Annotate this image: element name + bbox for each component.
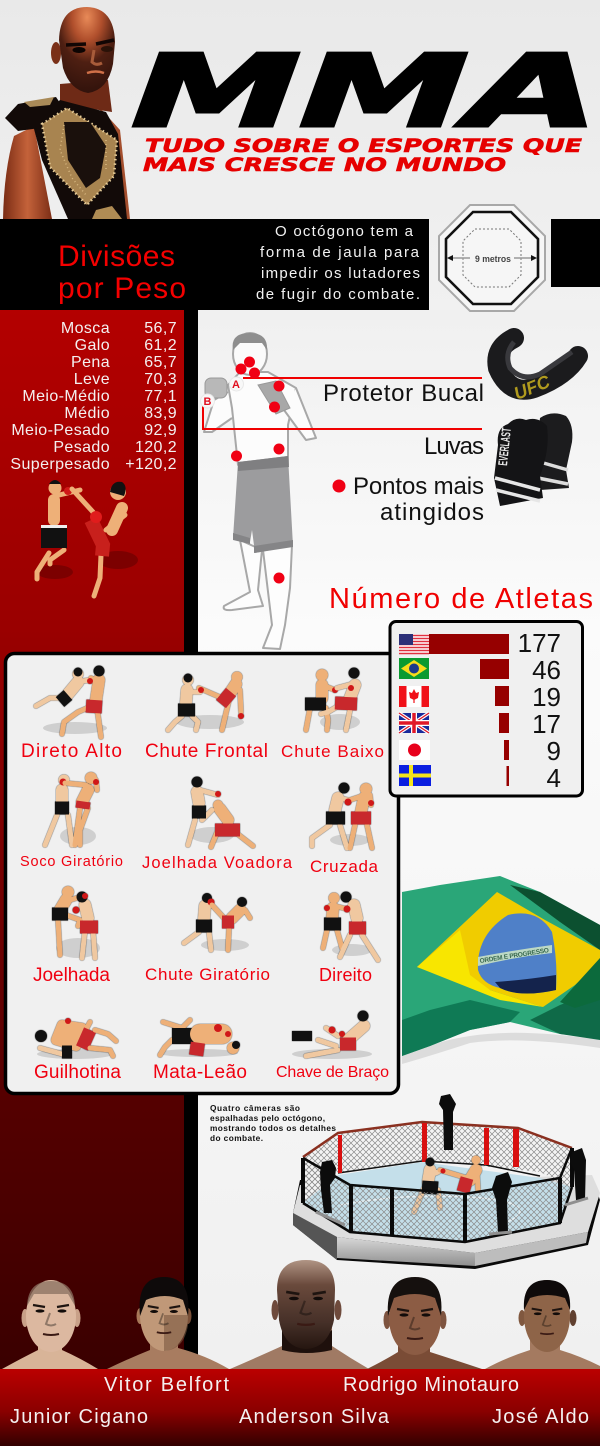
- subtitle: MAIS CRESCE NO MUNDO: [143, 154, 506, 176]
- icon: octagon diagram 9 metros: [439, 205, 545, 311]
- move: Joelhada: [52, 886, 100, 958]
- photo: Anderson Silva with belt: [3, 7, 130, 219]
- weight divisions list: Médio: [64, 405, 110, 422]
- text: cameras note: do combate.: [210, 1133, 263, 1143]
- title: MMA: MMA: [110, 34, 600, 150]
- text: octagon description: impedir os lutadores: [261, 265, 420, 282]
- text: octagon description: de fugir do combate.: [256, 286, 420, 303]
- weight divisions list: [10, 320, 177, 473]
- panel: fighting moves: [6, 654, 398, 1094]
- weight divisions list: Meio-Médio: [22, 388, 110, 405]
- label: Joelhada Voadora: Joelhada Voadora: [142, 854, 293, 872]
- move: Direto Alto: [36, 666, 107, 737]
- text: cameras note: [210, 1103, 336, 1143]
- weight divisions list: Pena: [71, 354, 110, 371]
- label: Direto Alto: Direto Alto: [21, 741, 122, 762]
- portrait: Rodrigo Minotauro: [367, 1277, 482, 1369]
- weight divisions list: +120,2: [125, 456, 177, 473]
- weight divisions list: 61,2: [144, 337, 177, 354]
- bar: Sweden 4: [506, 766, 509, 786]
- weight divisions list: Pesado: [53, 439, 110, 456]
- red lines: callouts: [203, 378, 482, 429]
- weight divisions list: Leve: [74, 371, 110, 388]
- move: Joelhada Voadora: [188, 776, 253, 847]
- black vertical stripe: [184, 310, 198, 1370]
- flag: Brazil: [399, 658, 429, 679]
- weight divisions list: 92,9: [144, 422, 177, 439]
- text: octagon description: O octógono tem a: [275, 223, 414, 240]
- weight divisions list: Meio-Pesado: [11, 422, 110, 439]
- bar: Brazil 46: [480, 659, 509, 679]
- heading: Divisões por Peso: [58, 240, 186, 305]
- cameraman: back: [439, 1094, 456, 1150]
- label: Chave de Braço: Chave de Braço: [276, 1064, 389, 1081]
- cameraman: front: [492, 1172, 512, 1232]
- flag: Japan: [399, 740, 430, 760]
- image: mouth guard: [497, 338, 578, 404]
- label: Cruzada: Cruzada: [310, 857, 379, 876]
- bar: Japan 9: [504, 740, 509, 760]
- label: Pontos mais atingidos: [353, 473, 484, 526]
- label: Mata-Leão: Mata-Leão: [153, 1062, 247, 1083]
- panel: red weight column: [0, 310, 184, 1370]
- weight divisions list: 77,1: [144, 388, 177, 405]
- black block right: [551, 219, 600, 287]
- markers A and B: [200, 377, 244, 408]
- move: Cruzada: [312, 782, 374, 848]
- portrait: Junior Cigano: [2, 1280, 98, 1369]
- flag: UK: [399, 713, 429, 733]
- hit points: [231, 356, 284, 584]
- weight divisions list: 70,3: [144, 371, 177, 388]
- value: 46: 46: [532, 655, 561, 685]
- name: José Aldo: José Aldo: [492, 1406, 589, 1428]
- value: 9: 9: [547, 736, 561, 766]
- flag: Sweden: [399, 765, 431, 786]
- subtitle: [143, 135, 582, 176]
- weight divisions list: 120,2: [135, 439, 177, 456]
- move: Chute Frontal: [168, 672, 244, 730]
- value: 177: 177: [518, 628, 561, 658]
- value: 17: 17: [532, 709, 561, 739]
- diagram: body with most-hit points: [204, 333, 316, 649]
- black header band: [0, 219, 429, 310]
- name: Vitor Belfort: Vitor Belfort: [104, 1374, 229, 1396]
- weight divisions list: Galo: [75, 337, 110, 354]
- legend dot: [332, 480, 346, 492]
- move: Chute Baixo: [305, 668, 360, 730]
- label: Soco Giratório: Soco Giratório: [20, 854, 123, 870]
- portrait: Anderson Silva: [230, 1260, 369, 1369]
- weight divisions list: Superpesado: [10, 456, 110, 473]
- markers A and B: B: [204, 396, 212, 408]
- move: Soco Giratório: [45, 772, 99, 845]
- label: Chute Giratório: Chute Giratório: [145, 965, 270, 984]
- subtitle: TUDO SOBRE O ESPORTES QUE: [145, 135, 582, 157]
- cameraman: left: [320, 1160, 336, 1213]
- move: Mata-Leão: [158, 1020, 240, 1057]
- text: octagon description: forma de jaula para: [260, 244, 420, 261]
- image: Brazilian flag: ORDEM E PROGRESSO: [479, 947, 549, 965]
- image: mouth guard: UFC: [511, 371, 554, 404]
- move: Chute Giratório: [184, 893, 250, 951]
- label: Guilhotina: Guilhotina: [34, 1062, 121, 1083]
- image: gloves: [494, 413, 572, 506]
- weight divisions list: Mosca: [61, 320, 110, 337]
- label: Luvas: Luvas: [424, 433, 484, 460]
- label: Direito: Direito: [319, 965, 372, 985]
- icon: octagon diagram 9 metros: 9 metros: [475, 254, 511, 264]
- two fighters in cage: [414, 1156, 480, 1212]
- markers A and B: A: [232, 379, 240, 391]
- move: Direito: [323, 892, 378, 960]
- weight divisions list: 65,7: [144, 354, 177, 371]
- name: Anderson Silva: Anderson Silva: [239, 1406, 390, 1428]
- bottom red bar: [0, 1369, 600, 1446]
- bar: Canada 19: [495, 686, 509, 706]
- name: Junior Cigano: Junior Cigano: [10, 1406, 148, 1428]
- text: cameras note: Quatro câmeras são: [210, 1103, 300, 1113]
- illustration: octagon cage with cameramen: [293, 1094, 600, 1269]
- text: cameras note: mostrando todos os detalhes: [210, 1123, 336, 1133]
- flag: USA: [399, 634, 429, 654]
- text: octagon description: [256, 223, 420, 303]
- panel: number of athletes: [390, 622, 582, 796]
- image: gloves: EVERLAST: [495, 427, 514, 466]
- flag: Canada: [399, 686, 429, 707]
- portrait: José Aldo: [485, 1280, 600, 1369]
- illustration: kicking fighters on red: [37, 480, 138, 596]
- move: Chave de Braço: [292, 1010, 372, 1059]
- name: Rodrigo Minotauro: Rodrigo Minotauro: [343, 1374, 519, 1396]
- text: cameras note: espalhadas pelo octógono,: [210, 1113, 325, 1123]
- portrait: Vitor Belfort: [107, 1277, 229, 1369]
- move: Guilhotina: [35, 1018, 116, 1059]
- weight divisions list: 56,7: [144, 320, 177, 337]
- weight divisions list: 83,9: [144, 405, 177, 422]
- label: Pontos mais atingidos: Pontos mais: [353, 473, 484, 500]
- heading: Divisões por Peso: Divisões: [58, 240, 175, 273]
- label: Chute Frontal: Chute Frontal: [145, 741, 268, 762]
- label: Chute Baixo: Chute Baixo: [281, 742, 384, 761]
- heading: Divisões por Peso: por Peso: [58, 272, 186, 305]
- label: Protetor Bucal: Protetor Bucal: [323, 380, 484, 407]
- value: 19: 19: [532, 682, 561, 712]
- image: Brazilian flag: [402, 876, 600, 1064]
- value: 4: 4: [547, 763, 561, 793]
- bar: UK 17: [499, 713, 509, 733]
- cameraman: right: [570, 1148, 586, 1200]
- label: Pontos mais atingidos: atingidos: [380, 499, 484, 526]
- label: Joelhada: Joelhada: [33, 965, 110, 986]
- heading: Número de Atletas: Número de Atletas: [329, 583, 593, 615]
- bar: USA 177: [429, 634, 509, 654]
